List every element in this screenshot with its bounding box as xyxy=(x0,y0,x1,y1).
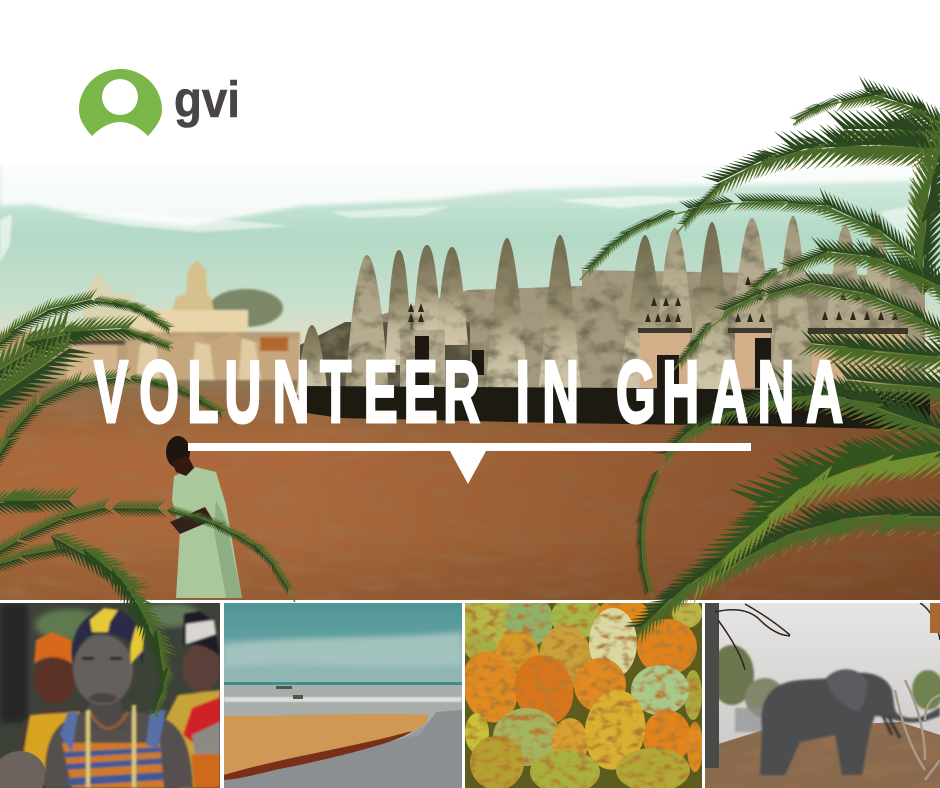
frond xyxy=(925,150,940,250)
cloudy sky xyxy=(224,603,462,685)
frond xyxy=(0,330,173,373)
town lower buildings xyxy=(0,330,302,381)
frond xyxy=(0,360,50,398)
vent holes xyxy=(408,276,898,322)
forest background xyxy=(0,603,220,788)
frond xyxy=(0,550,165,717)
man's head xyxy=(166,436,190,468)
dark sand edge xyxy=(224,731,412,780)
man's arm xyxy=(170,507,213,534)
mosque xyxy=(296,215,925,395)
boats xyxy=(276,686,303,699)
headwrap xyxy=(72,609,143,665)
mosque doorways xyxy=(415,336,771,388)
frond xyxy=(0,302,170,346)
perforated upper walls xyxy=(640,277,910,332)
frond xyxy=(860,380,940,388)
savanna ground xyxy=(705,722,940,788)
elephant xyxy=(760,669,940,775)
bead necklaces xyxy=(90,712,128,728)
ground xyxy=(0,388,940,600)
sea xyxy=(224,685,462,788)
palm fronds: left cluster xyxy=(0,302,295,717)
mosque walls xyxy=(300,270,925,395)
photo: beach sandbar xyxy=(224,603,465,788)
conical mud buttresses xyxy=(296,215,896,395)
palm fronds: right cluster xyxy=(580,97,940,637)
peach wall panels xyxy=(640,332,905,388)
photo: cocoa pods xyxy=(450,592,703,788)
frond xyxy=(0,508,295,602)
distant trees xyxy=(710,645,940,732)
sand spit xyxy=(224,714,428,778)
foreground shrub branches xyxy=(895,680,940,780)
distant trees xyxy=(209,289,283,327)
brush streaks in sky xyxy=(0,165,940,261)
frond xyxy=(793,97,940,125)
frond xyxy=(725,517,940,573)
cocoa pod cluster xyxy=(450,592,703,788)
main woman xyxy=(45,608,193,788)
distant town xyxy=(0,260,300,395)
right ground shading xyxy=(423,388,940,600)
grey channel water xyxy=(224,710,462,788)
frond xyxy=(860,130,940,137)
frond xyxy=(637,457,940,637)
frond xyxy=(0,380,227,460)
logo: gvi xyxy=(79,69,240,136)
logo wordmark: gvi xyxy=(174,71,240,128)
frond xyxy=(825,345,940,357)
man walking xyxy=(166,436,242,598)
frond xyxy=(580,202,940,292)
tusks xyxy=(883,716,900,738)
title underline with pointer xyxy=(188,443,751,484)
man's robe xyxy=(172,467,242,598)
elephant body xyxy=(760,673,940,775)
pale town building xyxy=(130,310,248,334)
frond xyxy=(642,397,940,597)
photo: elephant in savanna xyxy=(705,603,940,788)
kente dress xyxy=(62,743,164,788)
frond xyxy=(672,288,940,372)
elephant ear xyxy=(826,669,868,712)
hazy sky xyxy=(705,603,940,788)
surf line xyxy=(224,697,462,702)
minaret tower xyxy=(172,260,214,312)
shoulders xyxy=(45,712,193,788)
black mosque base xyxy=(300,386,930,430)
left woman xyxy=(21,631,85,788)
bare branches xyxy=(715,603,940,670)
frond xyxy=(0,500,70,503)
foreground orange leaf xyxy=(930,603,940,633)
icon: green person mark xyxy=(79,69,162,136)
frond xyxy=(677,146,940,233)
sky xyxy=(0,165,940,400)
right woman xyxy=(165,611,220,788)
neck xyxy=(88,699,122,712)
hero photo: mosque landscape xyxy=(0,160,940,600)
bottom-left patterned cloth xyxy=(0,751,46,788)
tree trunk xyxy=(705,603,719,768)
white domed building xyxy=(83,275,133,330)
dark roof ledges xyxy=(638,328,908,334)
horizon line xyxy=(224,682,462,685)
face xyxy=(73,635,133,705)
title: VOLUNTEER IN GHANA xyxy=(94,344,843,442)
frond xyxy=(745,255,935,295)
photo: women in kente xyxy=(0,603,220,788)
